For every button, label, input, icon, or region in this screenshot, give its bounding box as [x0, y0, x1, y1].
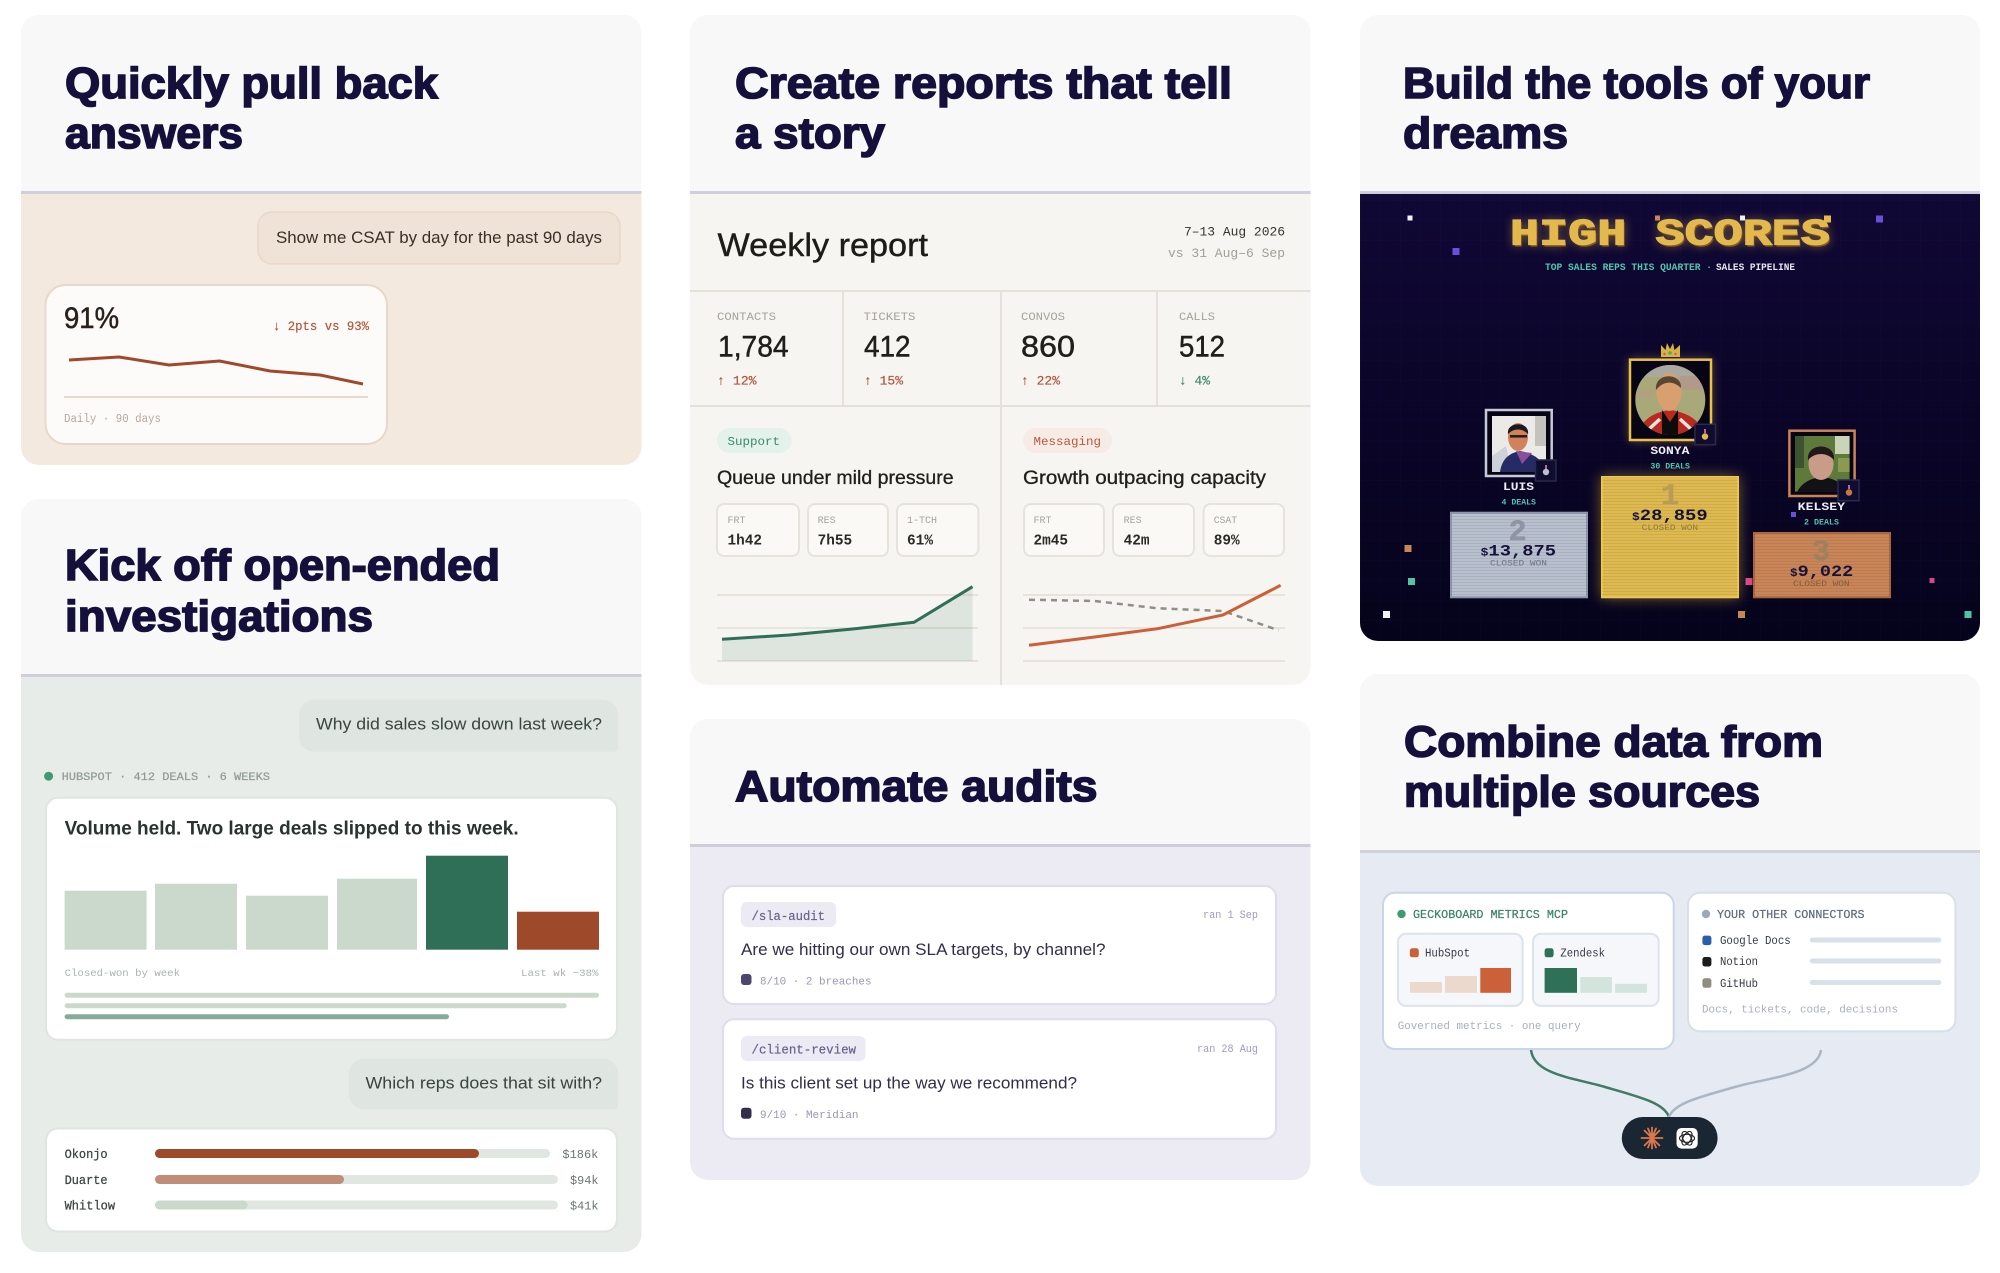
metric tiles: CSAT: [1214, 515, 1237, 527]
audit card: client review: [723, 1019, 1276, 1139]
heading: [1404, 718, 1823, 816]
metric tiles: 61%: [907, 534, 933, 550]
rep breakdown card: Duarte: [65, 1174, 108, 1188]
heading: answers: [65, 109, 243, 158]
CSAT card: ↓ 2pts vs 93%: [273, 319, 369, 334]
bar chart: [65, 856, 599, 950]
source: zendesk: [1533, 934, 1659, 1006]
high scores title: HIGH SCORES: [1512, 216, 1832, 258]
metric tiles: 89%: [1214, 534, 1240, 550]
panel: automate audits: [690, 719, 1310, 1180]
podium: gold: CLOSED WON: [1642, 524, 1698, 533]
audit card: sla audit: /sla-audit: [752, 909, 825, 924]
CSAT card: [46, 285, 387, 444]
report header: vs 31 Aug–6 Sep: [1168, 246, 1285, 261]
chat bubble: [258, 212, 620, 264]
rep breakdown card: Okonjo: [65, 1148, 108, 1162]
medal: bronze: [1838, 480, 1859, 501]
section: messaging: Growth outpacing capacity: [1023, 468, 1267, 489]
audit card: sla audit: [723, 886, 1276, 1004]
stat: contacts: CONTACTS: [717, 312, 776, 324]
heading: Kick off open-ended: [65, 541, 500, 590]
podium: gold: 1: [1661, 480, 1679, 514]
podium: gold: $28,859: [1632, 507, 1708, 525]
metric tiles: [1024, 504, 1284, 556]
rep breakdown card: Whitlow: [65, 1200, 116, 1214]
section: support: Support: [728, 435, 780, 449]
podium: bronze: CLOSED WON: [1793, 580, 1850, 589]
first place: Sonya: [1602, 343, 1738, 597]
podium: silver: 2: [1509, 516, 1527, 550]
chat bubble: [349, 1058, 618, 1110]
line chart: [69, 357, 363, 384]
AI clients pill: [1622, 1117, 1718, 1159]
heading: multiple sources: [1404, 768, 1760, 816]
chat bubble: Why did sales slow down last week?: [316, 715, 602, 734]
audit card: sla audit: Are we hitting our own SLA targets, by channel?: [741, 940, 1106, 959]
podium: silver: CLOSED WON: [1490, 560, 1547, 569]
icon: knot logo: [1676, 1128, 1698, 1149]
stat: convos: ↑ 22%: [1021, 373, 1060, 388]
report header: 7–13 Aug 2026: [1184, 225, 1285, 240]
metric tiles: FRT: [1034, 515, 1052, 527]
chat bubble: Show me CSAT by day for the past 90 days: [276, 228, 602, 247]
rep breakdown card: [46, 1128, 617, 1232]
rep breakdown card: $94k: [570, 1174, 598, 1188]
stat: contacts: ↑ 12%: [717, 373, 757, 388]
connector: grey curve: [1669, 1050, 1821, 1117]
icon: orange asterisk: [1642, 1128, 1662, 1148]
source label: HUBSPOT · 412 DEALS · 6 WEEKS: [62, 772, 270, 784]
stat: contacts: 1,784: [718, 331, 789, 364]
metric tiles: 7h55: [818, 534, 852, 550]
stat: convos: [1021, 312, 1075, 388]
stat: tickets: 412: [864, 331, 911, 364]
heading: dreams: [1403, 109, 1568, 158]
card: other connectors: [1688, 893, 1955, 1031]
icon: crown: [1661, 343, 1680, 357]
card: geckoboard metrics mcp: GECKOBOARD METRICS MCP: [1413, 909, 1568, 922]
line chart: [1023, 585, 1285, 661]
pixel particles: [1383, 216, 1972, 618]
panel: kick off open-ended investigations: [21, 499, 642, 1252]
podium: bronze: 3: [1812, 536, 1830, 570]
rep breakdown card: $41k: [570, 1200, 598, 1214]
podium: silver: $13,875: [1481, 543, 1556, 561]
podium: bronze: [1754, 533, 1890, 597]
heading: Combine data from: [1404, 718, 1823, 766]
card: geckoboard metrics mcp: [1383, 893, 1674, 1049]
high scores title: HIGH SCORES: [1510, 214, 1830, 256]
card: other connectors: Notion: [1720, 956, 1758, 969]
heading: [65, 541, 500, 641]
audit card: client review: Is this client set up the way we recommend?: [741, 1074, 1077, 1093]
panel: create reports that tell a story: [690, 15, 1310, 685]
heading: [735, 59, 1232, 158]
heading: Automate audits: [735, 762, 1098, 811]
findings card: [46, 798, 617, 1040]
stat: calls: CALLS: [1179, 312, 1215, 324]
audit card: sla audit: ran 1 Sep: [1203, 910, 1258, 922]
heading: Build the tools of your: [1403, 59, 1870, 108]
heading: investigations: [65, 592, 373, 641]
heading: Create reports that tell: [735, 59, 1232, 108]
card: geckoboard metrics mcp: Governed metrics · one query: [1398, 1021, 1581, 1033]
metric tiles: 1-TCH: [907, 515, 937, 527]
audit card: client review: /client-review: [752, 1043, 856, 1058]
card: other connectors: GitHub: [1720, 978, 1758, 991]
stat: tickets: [864, 312, 916, 388]
findings card: Closed-won by week: [65, 968, 180, 980]
report header: Weekly report: [718, 227, 928, 263]
heading: [1403, 59, 1870, 158]
medal: gold: [1695, 424, 1716, 445]
panel: quickly pull back answers: [21, 15, 642, 465]
chat bubble: [299, 700, 618, 752]
card: other connectors: YOUR OTHER CONNECTORS: [1717, 909, 1865, 922]
source: zendesk: Zendesk: [1560, 948, 1605, 960]
stat: tickets: ↑ 15%: [864, 373, 903, 388]
first place: Sonya: SONYA: [1650, 446, 1690, 458]
podium: bronze: $9,022: [1790, 563, 1853, 581]
card: other connectors: Docs, tickets, code, decisions: [1702, 1004, 1898, 1016]
heading: a story: [735, 109, 886, 158]
area chart: [717, 587, 978, 661]
metric tiles: [717, 504, 978, 556]
section: messaging: [1023, 428, 1285, 661]
metric tiles: FRT: [728, 515, 746, 527]
portrait: Luis: [1486, 410, 1552, 476]
second place: Luis: 4 DEALS: [1502, 498, 1536, 508]
CSAT card: 91%: [64, 302, 119, 335]
connector: green curve: [1531, 1050, 1669, 1117]
card: other connectors: Google Docs: [1720, 935, 1791, 948]
podium: gold: [1602, 477, 1738, 597]
panel: combine data from multiple sources: [1360, 674, 1980, 1186]
stat: calls: ↓ 4%: [1179, 373, 1210, 388]
section: support: Queue under mild pressure: [717, 468, 954, 489]
second place: Luis: [1451, 410, 1587, 597]
findings card: Last wk −38%: [521, 968, 599, 980]
second place: Luis: LUIS: [1503, 482, 1534, 494]
stat: calls: 512: [1179, 331, 1225, 364]
portrait: Kelsey: [1789, 431, 1855, 496]
scoreboard subtitle: TOP SALES REPS THIS QUARTER ·: [1545, 262, 1712, 274]
arcade scoreboard background: [1360, 194, 1980, 641]
third place: Kelsey: [1754, 431, 1890, 597]
metric tiles: RES: [818, 515, 836, 527]
panel: build the tools of your dreams: [1360, 15, 1980, 641]
stat: tickets: TICKETS: [864, 312, 916, 324]
report header: [718, 225, 1285, 263]
audit card: client review: ran 28 Aug: [1197, 1044, 1258, 1056]
metric tiles: RES: [1124, 515, 1142, 527]
third place: Kelsey: 2 DEALS: [1804, 518, 1839, 528]
section: support: [717, 428, 978, 661]
chat bubble: Which reps does that sit with?: [366, 1074, 602, 1092]
findings card: Volume held. Two large deals slipped to this week.: [65, 819, 519, 840]
podium: silver: [1451, 513, 1587, 597]
medal: silver: [1536, 460, 1556, 481]
scoreboard subtitle: SALES PIPELINE: [1716, 262, 1795, 274]
stat: convos: CONVOS: [1021, 312, 1065, 324]
third place: Kelsey: KELSEY: [1798, 502, 1845, 514]
audit card: sla audit: 8/10 · 2 breaches: [760, 977, 872, 989]
first place: Sonya: 30 DEALS: [1650, 462, 1690, 472]
source: hubspot: [1398, 934, 1523, 1006]
stat: contacts: [717, 312, 789, 388]
stat: calls: [1179, 312, 1225, 388]
heading: [65, 59, 439, 158]
source: hubspot: HubSpot: [1425, 948, 1470, 960]
section: messaging: Messaging: [1034, 435, 1101, 449]
audit card: client review: 9/10 · Meridian: [760, 1110, 858, 1122]
portrait: Sonya: [1630, 360, 1711, 440]
rep breakdown card: $186k: [562, 1148, 598, 1162]
stat: convos: 860: [1021, 331, 1075, 364]
CSAT card: Daily · 90 days: [64, 413, 161, 426]
heading: Quickly pull back: [65, 59, 439, 108]
metric tiles: 1h42: [728, 534, 762, 550]
metric tiles: 2m45: [1034, 534, 1068, 550]
metric tiles: 42m: [1124, 534, 1150, 550]
